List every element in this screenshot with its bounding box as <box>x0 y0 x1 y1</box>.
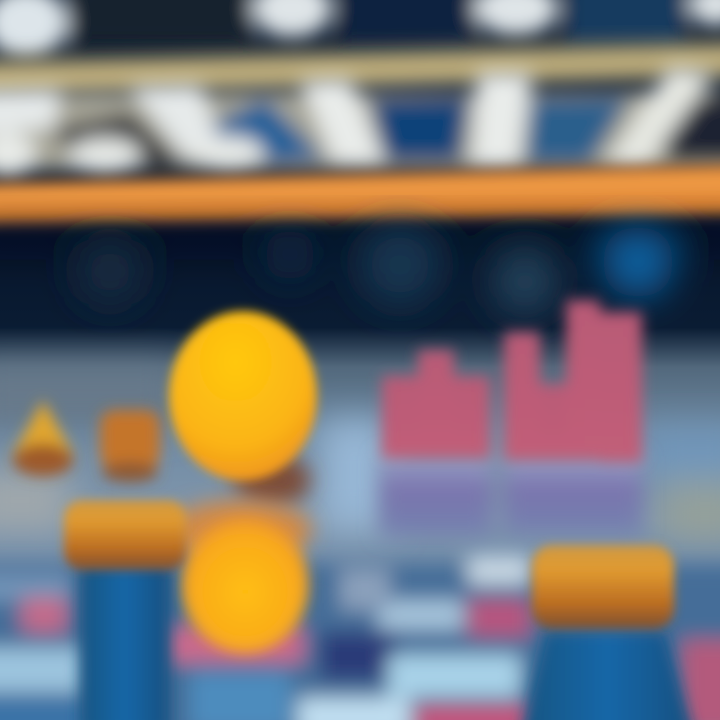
right pillar: orange block on blue column <box>520 545 695 720</box>
icon: lower yellow circle <box>168 500 312 653</box>
icon: small orange cylinder <box>100 410 160 482</box>
tan horizontal beam <box>0 42 720 98</box>
pink bars <box>382 300 642 462</box>
icon: upper yellow circle <box>169 311 317 506</box>
left pillar: orange block on blue column <box>64 500 186 720</box>
bottom mosaic floor <box>0 555 720 720</box>
icon: small orange cone <box>12 400 74 476</box>
bar reflection <box>380 456 642 536</box>
chart: pink bars with reflection <box>380 300 642 536</box>
orange horizontal bar <box>0 164 720 224</box>
checker band under the beam <box>0 66 720 177</box>
top row: white blocks on navy <box>0 0 720 58</box>
dark band with faint dots <box>0 223 720 316</box>
pale floor tint <box>0 365 720 540</box>
